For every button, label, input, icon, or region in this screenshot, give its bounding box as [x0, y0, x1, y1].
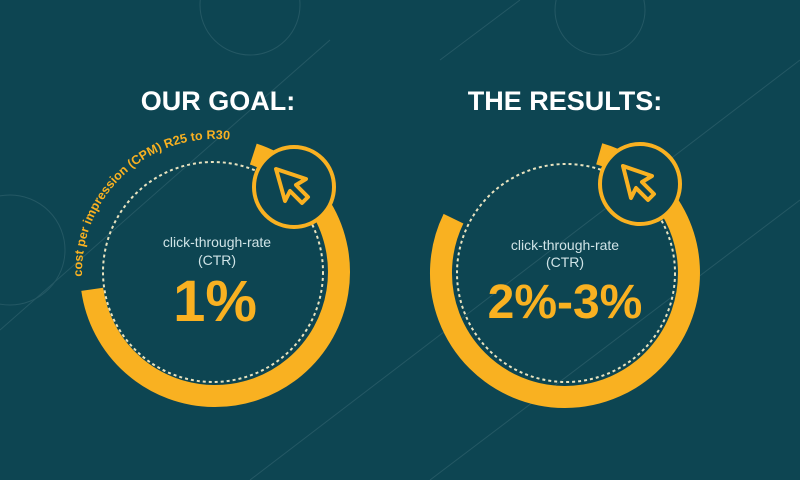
big number: 2%-3% [488, 276, 642, 329]
title: our goal: OUR GOAL: [141, 86, 295, 116]
panel: goal: (CTR) [198, 252, 236, 268]
dashed circle [103, 162, 323, 382]
text: ctr label: click-through-rate [511, 237, 619, 253]
yellow arc [441, 154, 689, 397]
icon: cursor [254, 147, 334, 227]
panel: results: (CTR) [546, 254, 584, 270]
big number: 1% [173, 269, 257, 334]
panel: goal [75, 130, 350, 407]
dashed circle [457, 164, 675, 382]
icon: cursor [600, 144, 680, 224]
curved label: cost per impression (CPM) R25 to R30 [75, 130, 230, 276]
yellow arc [92, 154, 339, 396]
title: the results: THE RESULTS: [468, 86, 662, 116]
text: ctr label: click-through-rate [163, 234, 271, 250]
panel: results [441, 144, 689, 397]
